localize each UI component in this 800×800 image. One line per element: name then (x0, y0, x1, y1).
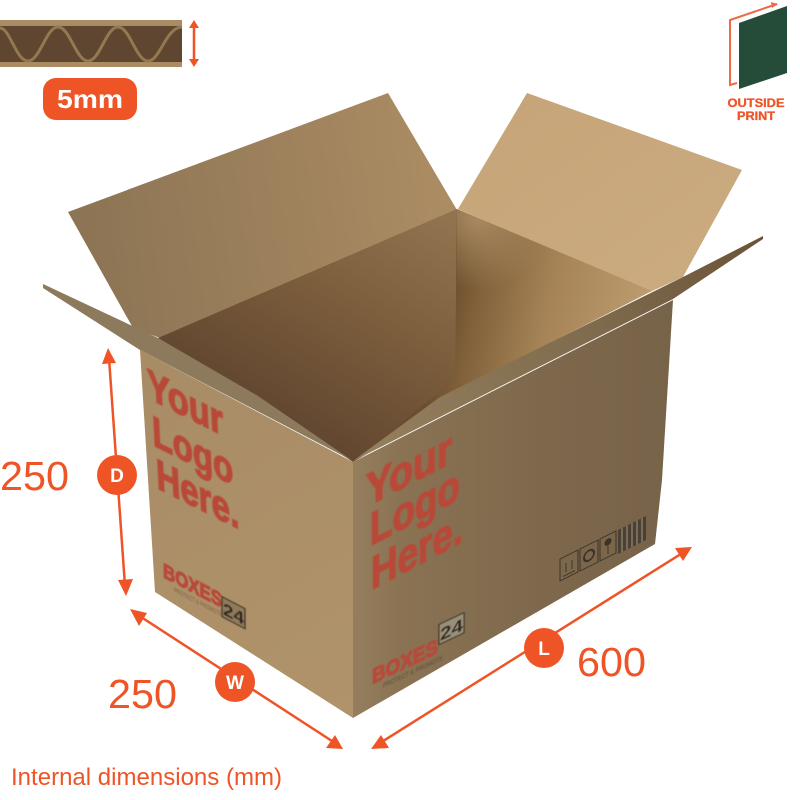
width value: 250 (108, 671, 177, 717)
rear left flap (68, 93, 457, 338)
icon: outside print panel (730, 2, 787, 89)
left face brand logo: 24 (223, 599, 244, 630)
width dimension arrow (130, 609, 343, 749)
right face brand logo (372, 613, 464, 695)
right face brand logo: BOXES (372, 634, 438, 689)
left face logo text: Here. (155, 449, 240, 539)
cardboard box (43, 93, 763, 718)
thickness label 5mm: 5mm (57, 84, 123, 114)
right outer face (353, 300, 673, 718)
thickness label 5mm (43, 78, 137, 120)
right face logo text: Logo (370, 458, 460, 556)
depth dimension arrow: D (110, 466, 124, 487)
length dimension arrow (371, 547, 692, 749)
length dimension arrow: L (538, 639, 550, 660)
interior back wall (158, 209, 460, 462)
outside print label (728, 96, 784, 123)
outside print label: PRINT (737, 109, 776, 123)
interior side wall (353, 209, 652, 460)
caption: Internal dimensions (mm) (11, 764, 282, 791)
depth value: 250 (0, 453, 69, 499)
right face brand logo: PROTECT & PROMOTE (383, 655, 443, 690)
interior side wall highlight (457, 209, 600, 340)
corrugation thickness sample (0, 20, 182, 67)
thickness arrow (189, 20, 199, 67)
left outer face (140, 350, 353, 718)
right face logo text: Here. (371, 501, 463, 600)
right face logo text (366, 421, 463, 600)
left face logo text: Logo (151, 406, 234, 495)
width dimension arrow: W (226, 673, 244, 694)
depth dimension arrow (97, 348, 137, 596)
right face brand logo: 24 (440, 615, 463, 646)
left face brand logo: BOXES (163, 559, 222, 612)
rear right flap (458, 93, 742, 292)
left face brand logo: PROTECT & PROMOTE (174, 587, 222, 619)
left face logo text (146, 359, 240, 539)
front right thin flap (353, 236, 763, 461)
handling symbols and barcode (560, 516, 646, 583)
length value: 600 (577, 639, 646, 685)
right face logo text: Your (366, 421, 452, 517)
front left thin flap (43, 284, 353, 461)
outside print label: OUTSIDE (728, 96, 784, 110)
left face logo text: Your (146, 359, 224, 445)
